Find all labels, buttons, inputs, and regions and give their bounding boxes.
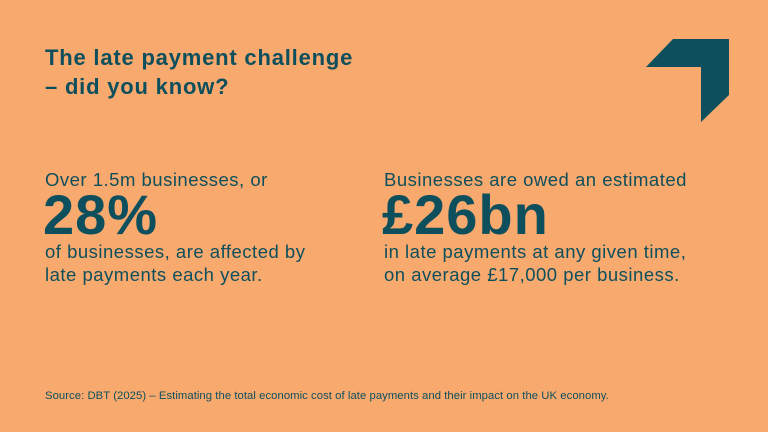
stat: £26bn: on average £17,000 per business.	[384, 264, 680, 285]
stat: 28%: Over 1.5m businesses, or of businesses, are affected by	[45, 169, 305, 262]
stat: £26bn: Businesses are owed an estimated in late payments at any given time,	[384, 169, 687, 262]
stat: £26bn: £26bn	[382, 183, 549, 246]
title	[45, 45, 353, 99]
stat: 28%: late payments each year.	[45, 264, 263, 285]
stat: 28%: 28%	[43, 183, 158, 246]
source: Source: DBT (2025) – Estimating the total economic cost of late payments and their impact on the UK economy.	[45, 390, 609, 402]
title: The late payment challenge	[45, 45, 353, 70]
title: – did you know?	[45, 74, 229, 99]
